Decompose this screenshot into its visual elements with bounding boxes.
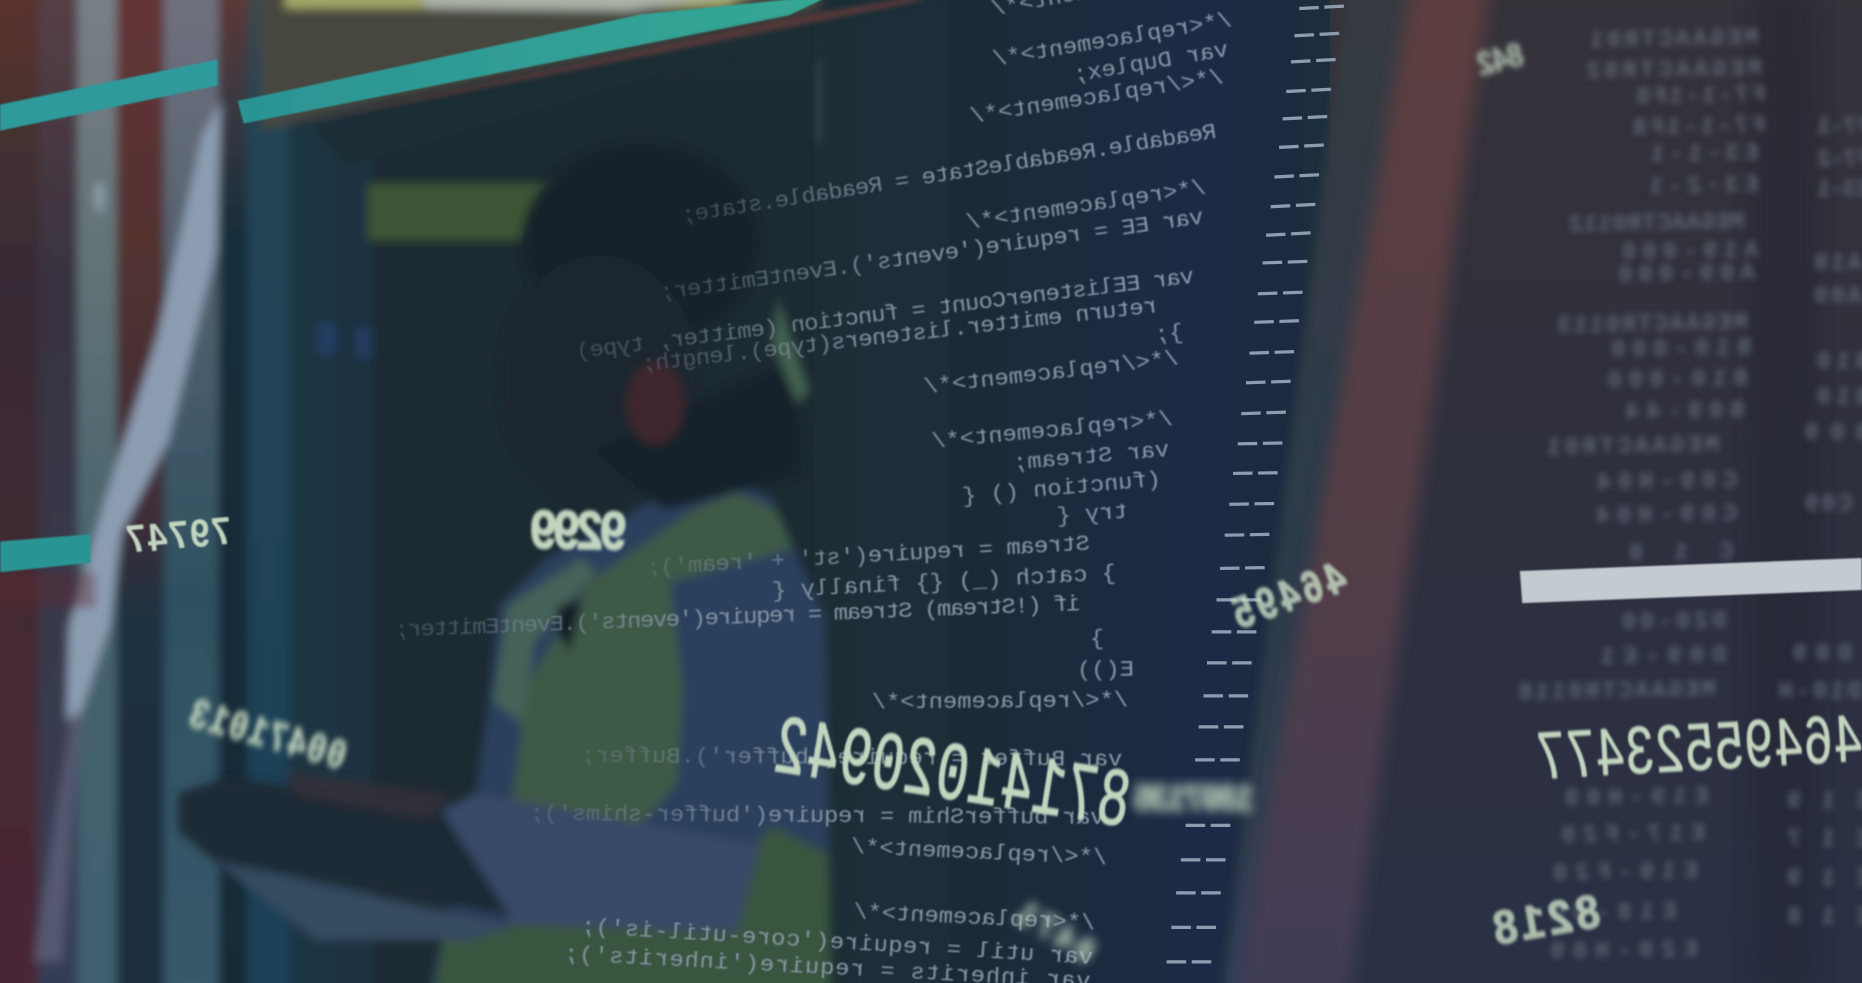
dash column: —— xyxy=(1201,644,1253,681)
dash column: —— xyxy=(1170,874,1222,911)
number: 46495: 46495 xyxy=(1226,554,1355,643)
dash column: —— xyxy=(1288,15,1341,54)
hat and head xyxy=(523,144,760,343)
dash column: —— xyxy=(1166,909,1217,946)
number: blurred bottom: 0471 xyxy=(1008,895,1101,973)
mirrored source code lines: /*</replacement>*/ xyxy=(850,835,1107,871)
dash column: —— xyxy=(1175,841,1226,878)
number: 8218: 8218 xyxy=(1488,886,1606,960)
forearm xyxy=(437,793,760,932)
right screen blurred table: E3-2-1 xyxy=(1649,172,1759,201)
dash column: —— xyxy=(1235,393,1287,432)
right screen blurred table: F7-1-1F8 xyxy=(1632,113,1766,142)
dash column xyxy=(1161,0,1346,980)
dash column: —— xyxy=(1284,41,1337,80)
dash column: —— xyxy=(1264,185,1317,225)
teal bar low xyxy=(0,534,90,572)
right screen blurred table: E20-H09 xyxy=(1550,937,1698,966)
dash column: —— xyxy=(1211,581,1262,618)
mirrored source code lines: /*</replacement>*/ xyxy=(968,65,1225,130)
right screen blurred table: D10-H xyxy=(1779,679,1862,706)
dash column: —— xyxy=(1232,424,1284,462)
right screen blurred table: C10 xyxy=(1629,539,1734,568)
right screen blurred table: A19-000 xyxy=(1622,237,1759,267)
right screen blurred table: E18-00 xyxy=(1550,899,1677,928)
mirrored source code lines: } catch (_) {} finally { xyxy=(771,561,1117,604)
mirrored source code lines: try { xyxy=(1056,499,1129,529)
right screen blurred table: A19 xyxy=(1814,250,1862,277)
mirrored source code lines: } xyxy=(1090,626,1105,652)
mirrored source code lines: var bufferShim = require('buffer-shims'); xyxy=(530,802,1104,831)
dash column: —— xyxy=(1161,943,1212,980)
jacket xyxy=(428,469,831,983)
dash column: —— xyxy=(1193,708,1244,745)
right screen blurred table xyxy=(1518,25,1862,966)
right screen blurred table: E19-H09 xyxy=(1565,784,1709,813)
ear protector xyxy=(627,363,684,444)
vest xyxy=(510,493,793,831)
mirrored source code lines: /*<replacement>*/ xyxy=(853,900,1096,936)
dash column: —— xyxy=(1239,362,1292,401)
right screen blurred table: MEGAACTR01 xyxy=(1547,432,1719,462)
dash column: —— xyxy=(1206,613,1257,650)
dash column: —— xyxy=(1180,806,1231,843)
dash column: —— xyxy=(1268,156,1321,195)
dash column: —— xyxy=(1276,98,1329,137)
mirrored source code lines: var EE = require('events').EventEmitter; xyxy=(658,205,1205,306)
mirrored source code lines: /*</replacement>*/ xyxy=(922,346,1180,400)
right screen blurred table: E19-F20 xyxy=(1553,858,1698,888)
mirrored source code lines: Stream = require('st' + 'ream'); xyxy=(646,532,1090,581)
dash column: —— xyxy=(1223,485,1275,523)
dash column: —— xyxy=(1256,242,1309,281)
mirrored source code lines: var EElistenerCount = function (emitter, type) xyxy=(575,264,1195,365)
mirrored source code lines: return emitter.listeners(type).length; xyxy=(640,294,1159,378)
right screen blurred table: B10-000 xyxy=(1611,335,1751,364)
dash column: —— xyxy=(1259,214,1312,254)
dash column: —— xyxy=(1227,454,1279,492)
dash column: —— xyxy=(1198,677,1249,714)
mirrored source code lines: var Buffer = require('buffer').Buffer; xyxy=(581,744,1122,772)
right data screen background xyxy=(1330,0,1862,983)
mirrored source code lines: var Stream; xyxy=(1012,438,1170,476)
person in hi-vis vest xyxy=(178,144,831,983)
number: 9299: 9299 xyxy=(528,500,628,567)
collar xyxy=(493,558,596,724)
center code panel background xyxy=(819,0,1354,983)
right screen blurred table: C09 xyxy=(1805,491,1852,518)
lower vest xyxy=(434,825,831,983)
mirrored source code lines: }; xyxy=(1154,320,1185,348)
mirrored source code lines xyxy=(394,0,1246,983)
red strip under teal bar xyxy=(297,0,926,123)
number: 79747: 79747 xyxy=(124,510,234,566)
right screen blurred table: D09 xyxy=(1793,641,1852,668)
mirrored source code lines: E()) xyxy=(1077,657,1134,683)
right screen blurred table: MEGAACTR0112 xyxy=(1568,209,1744,239)
mirrored source code lines: /*<replacement>*/ xyxy=(964,176,1207,236)
dash column: —— xyxy=(1189,741,1241,778)
dash column: —— xyxy=(1219,516,1271,553)
right screen blurred table: MEGAACTR02 xyxy=(1586,56,1762,86)
right screen blurred table: E3-1-1 xyxy=(1650,140,1759,169)
grey monitor edge xyxy=(1221,0,1425,983)
right screen blurred table: MEGAACTR0118 xyxy=(1518,677,1716,707)
dash column: —— xyxy=(1279,70,1333,110)
dash column: —— xyxy=(1272,126,1325,166)
right screen blurred table: D09-E1 xyxy=(1600,642,1727,671)
dash column: —— xyxy=(1248,302,1300,341)
teal bar top xyxy=(238,0,831,123)
red monitor edge xyxy=(1235,0,1491,983)
mirrored source code lines: (function () { xyxy=(961,467,1162,510)
white highlighted row xyxy=(1520,558,1862,603)
right screen blurred table: E17-F20 xyxy=(1561,820,1705,850)
right screen blurred table: F7-1-1F8 xyxy=(1636,82,1766,111)
dash column: —— xyxy=(1243,333,1296,371)
dash column: —— xyxy=(1214,549,1266,587)
number: 00471013: 00471013 xyxy=(183,692,351,782)
right screen blurred table: A09 xyxy=(1814,284,1862,311)
right screen blurred table: MEGAACTR0113 xyxy=(1558,310,1748,340)
mirrored source code lines: if (!Stream) Stream = require('events').EventEmitter; xyxy=(394,592,1081,643)
mirrored source code lines: /*<replacement>*/ xyxy=(991,8,1234,73)
mirrored source code lines: /*<replacement>*/ xyxy=(931,407,1174,455)
right screen blurred table: D20-00 xyxy=(1622,608,1727,637)
teal bar left xyxy=(0,59,217,131)
mirrored source code lines: var Duplex; xyxy=(1072,38,1230,88)
tablet and hand xyxy=(178,778,511,917)
number: 87141020942: 87141020942 xyxy=(768,702,1136,851)
right screen blurred table: MEGAACTR01 xyxy=(1590,25,1759,55)
right screen blurred table: C09-H04 xyxy=(1597,468,1737,497)
right screen blurred table: A09-000 xyxy=(1618,260,1755,289)
number: blurred top right: 842 xyxy=(1473,38,1528,86)
mirrored source code lines: var util = require('core-util-is'); xyxy=(580,915,1094,971)
dash column: —— xyxy=(1251,273,1304,312)
right screen blurred table: C09-H04 xyxy=(1596,501,1737,530)
mirrored source code lines: Readable.ReadableState = Readable.state; xyxy=(680,120,1218,229)
mirrored source code lines: /*</replacement>*/ xyxy=(872,688,1128,715)
teal overlay bars xyxy=(0,0,926,572)
right screen blurred table: B09-44 xyxy=(1625,398,1744,427)
right screen blurred table: B10-000 xyxy=(1607,366,1748,395)
number: blurred centre: 1897135 xyxy=(1133,780,1254,821)
